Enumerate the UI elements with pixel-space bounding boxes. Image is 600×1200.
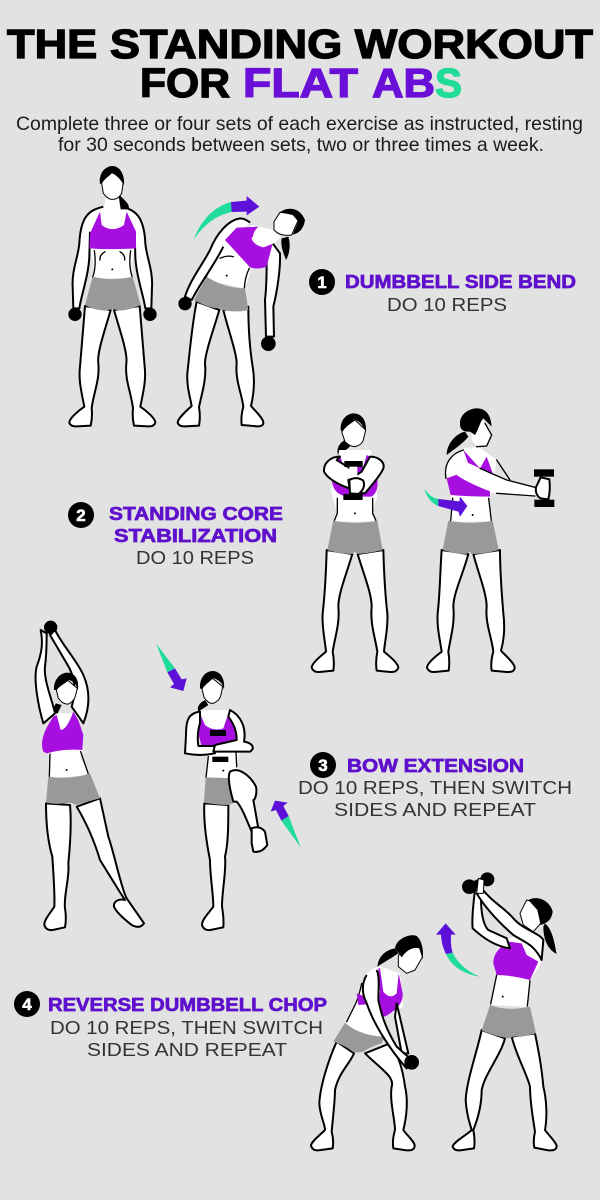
title (7, 21, 593, 106)
title: S (435, 60, 462, 106)
exercise 2 illustration (312, 408, 554, 672)
intro text (16, 113, 583, 156)
label: exercise 3: 3 (318, 756, 328, 775)
label: exercise 1 (309, 269, 576, 315)
title: FOR (140, 60, 230, 106)
figure 4a: bent over chop (311, 935, 423, 1150)
label: exercise 4: SIDES AND REPEAT (87, 1039, 287, 1060)
label: exercise 2 (68, 502, 283, 568)
arrow: upward chop direction (436, 923, 480, 977)
exercise 3 illustration (36, 621, 301, 930)
arrow: downward toward shoulder (156, 643, 187, 691)
arrow: side bend direction (194, 196, 259, 239)
label: exercise 3 (298, 752, 572, 820)
label: exercise 4: 4 (22, 995, 32, 1014)
title: AB (372, 60, 435, 106)
figure 2a: dumbbell held at chest (312, 413, 398, 672)
figure 1b: side bend (178, 209, 305, 426)
label: exercise 4 (14, 991, 327, 1060)
intro text: for 30 seconds between sets, two or three times a week. (58, 134, 544, 156)
label: exercise 3: BOW EXTENSION (347, 755, 524, 776)
label: exercise 1: 1 (317, 273, 327, 292)
arrow: upward toward knee (271, 801, 301, 847)
arrow: rotation direction (424, 488, 467, 517)
figure 4b: dumbbell raised overhead (453, 872, 557, 1150)
figure 3b: knee raise (185, 671, 267, 930)
title: FLAT (243, 60, 358, 106)
exercise 1 illustration (68, 166, 305, 426)
title: THE STANDING WORKOUT (7, 21, 593, 67)
intro text: Complete three or four sets of each exercise as instructed, resting (16, 113, 583, 135)
label: exercise 1: DO 10 REPS (387, 294, 507, 315)
figure 3a: arms overhead (36, 621, 144, 930)
label: exercise 4: REVERSE DUMBBELL CHOP (48, 994, 327, 1015)
label: exercise 3: SIDES AND REPEAT (334, 799, 536, 820)
label: exercise 2: 2 (76, 506, 86, 525)
label: exercise 3: DO 10 REPS, THEN SWITCH (298, 777, 572, 798)
exercise 4 illustration (311, 872, 557, 1150)
label: exercise 1: DUMBBELL SIDE BEND (345, 271, 576, 292)
label: exercise 2: DO 10 REPS (136, 547, 254, 568)
figure 1a: standing with dumbbells (68, 166, 157, 426)
label: exercise 4: DO 10 REPS, THEN SWITCH (50, 1017, 323, 1038)
label: exercise 2: STANDING CORE (109, 503, 283, 524)
figure 2b: arm extended with dumbbell (427, 408, 554, 672)
label: exercise 2: STABILIZATION (114, 525, 277, 546)
